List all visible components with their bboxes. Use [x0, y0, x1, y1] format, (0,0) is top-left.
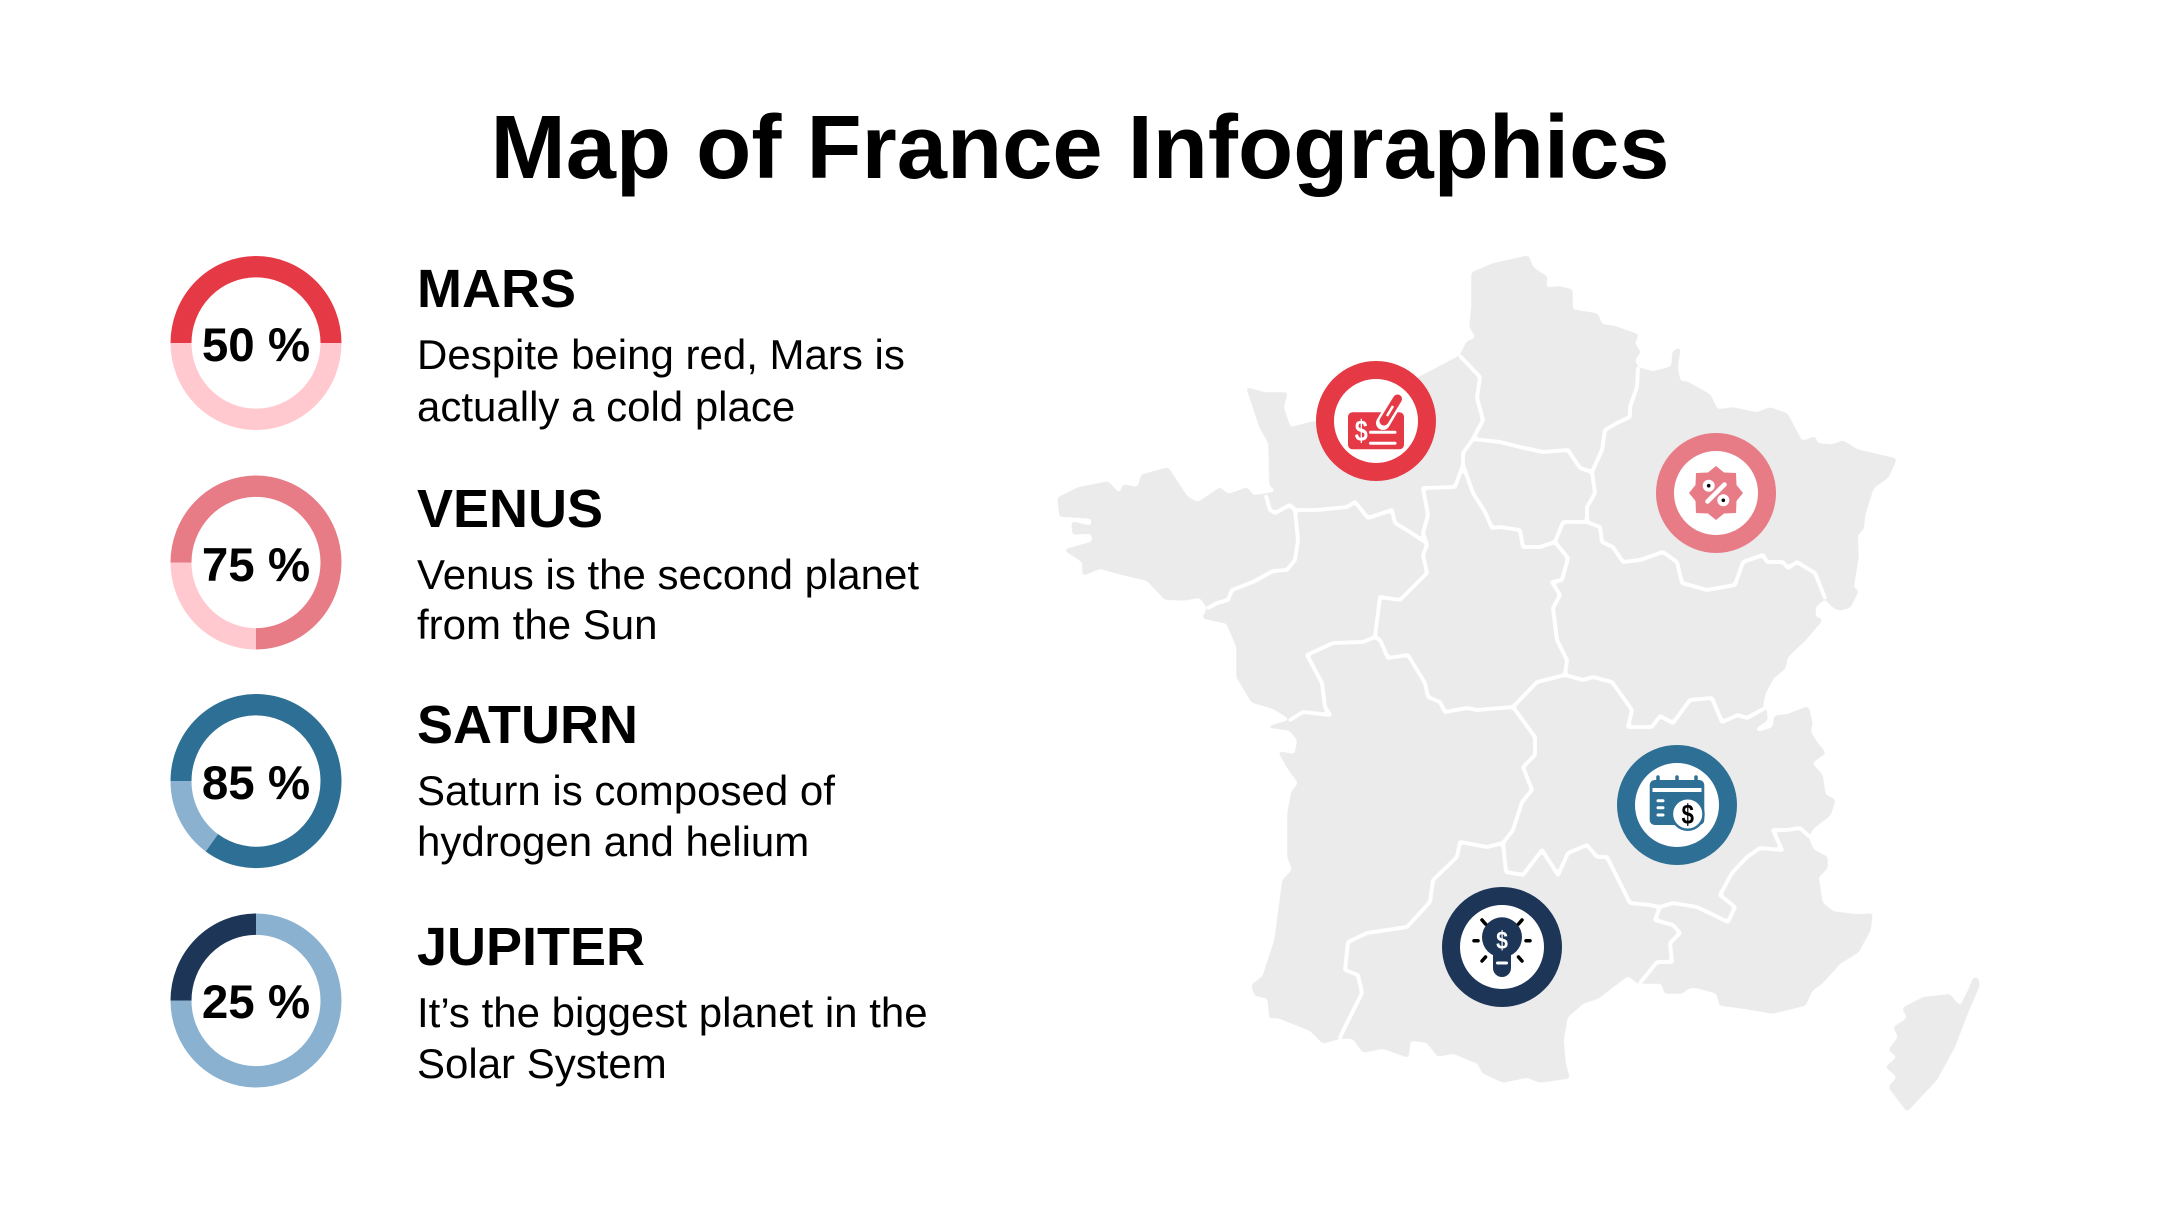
heading: Saturn: SATURN: [417, 695, 638, 755]
heading: Venus: VENUS: [417, 479, 603, 539]
panel: Mars row: [181, 259, 905, 430]
map: Corsica: [1885, 977, 1980, 1112]
icon marker: check on red ring: [1325, 370, 1427, 472]
heading: Mars: MARS: [417, 259, 576, 319]
text: Mars description: Despite being red, Mars is: [417, 331, 905, 378]
icon marker: check on red ring: $: [1355, 414, 1368, 448]
donut chart: Jupiter 25%: [181, 924, 331, 1077]
text: Saturn description: hydrogen and helium: [417, 818, 809, 865]
text: Jupiter description: Solar System: [417, 1040, 667, 1087]
panel: Jupiter row: [181, 917, 928, 1087]
donut chart: Venus 75%: 75 %: [202, 539, 310, 592]
panel: Saturn row: [181, 695, 835, 865]
donut chart: Jupiter 25%: 25 %: [202, 976, 310, 1029]
text: Mars description: actually a cold place: [417, 383, 795, 430]
map of France: [1058, 256, 1980, 1112]
icon marker: light bulb with dollar on navy ring: $: [1496, 926, 1508, 954]
icon marker: percent badge on pink ring: [1665, 442, 1767, 544]
title: Map of France Infographics: [490, 97, 1670, 198]
icon marker: calendar with dollar on blue ring: [1626, 754, 1728, 856]
text: Venus description: Venus is the second planet: [417, 551, 919, 598]
donut chart: Saturn 85%: [181, 705, 331, 857]
icon marker: calendar with dollar on blue ring: $: [1681, 800, 1694, 831]
icon marker: light bulb with dollar on navy ring: [1451, 896, 1553, 998]
heading: Jupiter: JUPITER: [417, 917, 645, 977]
donut chart: Mars 50%: 50 %: [202, 319, 310, 372]
panel: Venus row: [181, 479, 919, 648]
text: Venus description: from the Sun: [417, 601, 657, 648]
donut chart: Saturn 85%: 85 %: [202, 757, 310, 810]
donut chart: Venus 75%: [181, 486, 331, 639]
text: Saturn description: Saturn is composed of: [417, 767, 835, 814]
donut chart: Mars 50%: [181, 267, 331, 419]
map: region borders: [1208, 356, 1825, 1038]
text: Jupiter description: It’s the biggest planet in the: [417, 989, 928, 1036]
map: mainland silhouette: [1058, 256, 1896, 1082]
